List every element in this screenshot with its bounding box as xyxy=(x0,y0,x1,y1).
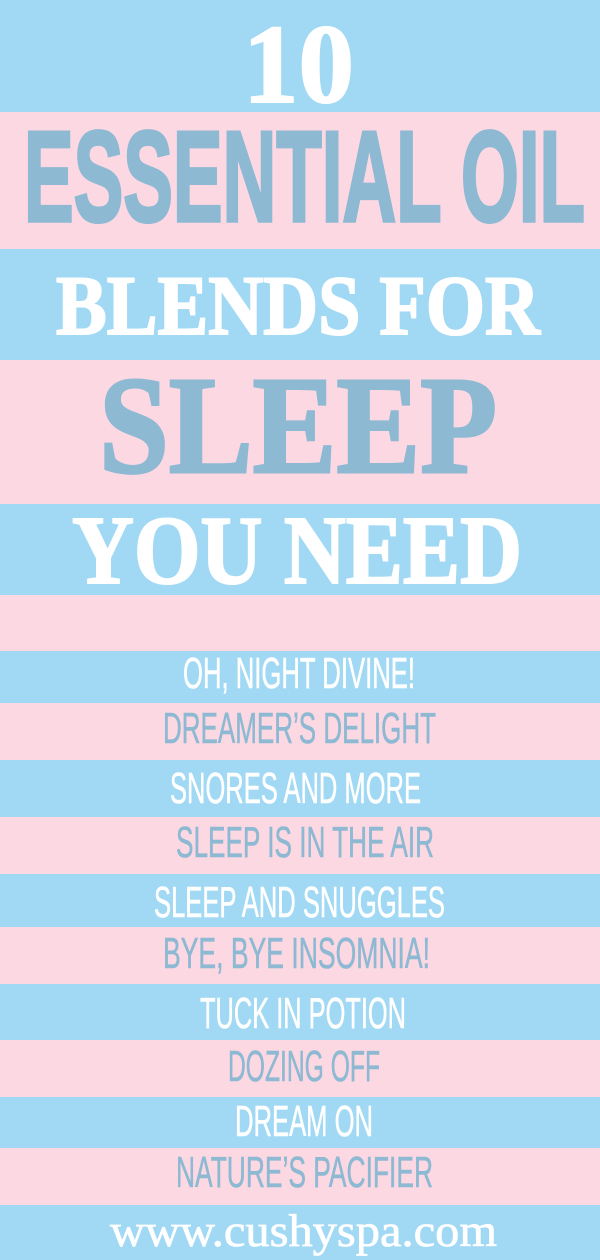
list item 8: DOZING OFF xyxy=(228,1042,380,1091)
list item 5 xyxy=(0,874,600,927)
title: sleep: SLEEP xyxy=(99,349,497,503)
list item 6 xyxy=(0,927,600,984)
list item 10: NATURE’S PACIFIER xyxy=(176,1148,433,1197)
list item 1 xyxy=(0,649,600,703)
list item 7 xyxy=(0,984,600,1040)
title: blends for: BLENDS FOR xyxy=(56,259,541,353)
title: you need: YOU NEED xyxy=(72,497,522,605)
list item 9 xyxy=(0,1097,600,1148)
list item 9: DREAM ON xyxy=(235,1097,373,1146)
list item 6: BYE, BYE INSOMNIA! xyxy=(163,929,430,978)
list item 8 xyxy=(0,1040,600,1097)
list item 2 xyxy=(0,703,600,760)
list item 10 xyxy=(0,1148,600,1205)
footer url xyxy=(0,1205,600,1260)
list item 7: TUCK IN POTION xyxy=(200,989,406,1038)
list item 1: OH, NIGHT DIVINE! xyxy=(183,649,415,698)
list item 3: SNORES AND MORE xyxy=(170,764,421,813)
footer url: www.cushyspa.com xyxy=(110,1205,497,1256)
list item 4: SLEEP IS IN THE AIR xyxy=(176,818,434,867)
list item 3 xyxy=(0,760,600,817)
title: 10: 10 xyxy=(243,3,354,127)
spacer band xyxy=(0,595,600,651)
list item 4 xyxy=(0,817,600,874)
title: 10 xyxy=(0,0,600,127)
